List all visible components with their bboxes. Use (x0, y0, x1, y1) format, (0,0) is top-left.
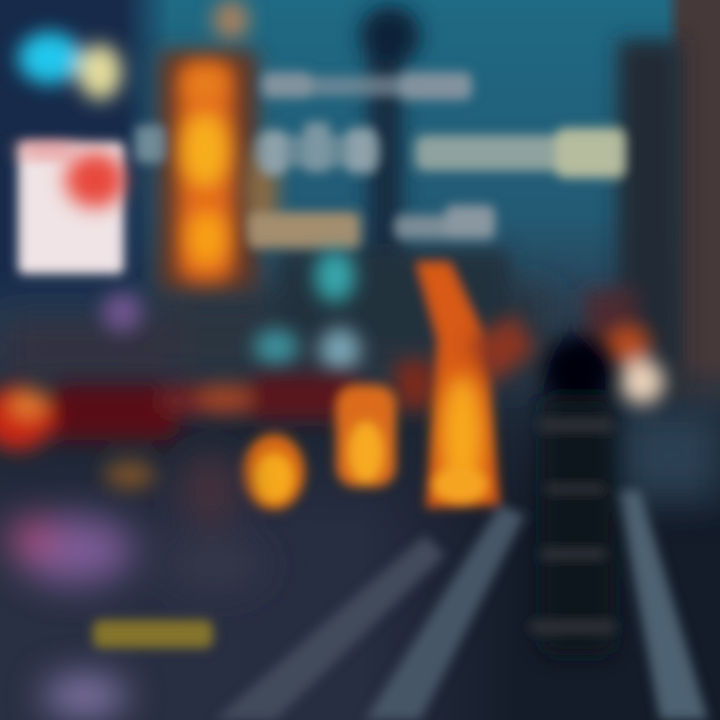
title text line 2 (135, 122, 625, 178)
figure stripes (530, 418, 616, 634)
figure body (542, 395, 614, 655)
right building shade (665, 0, 720, 420)
statue flame (416, 262, 535, 508)
button (93, 620, 213, 648)
small flame (243, 434, 305, 510)
street base (0, 480, 720, 720)
cyan lights (102, 250, 360, 372)
road markings (215, 490, 708, 720)
red cars (0, 360, 435, 490)
dark central tower (280, 6, 510, 340)
icon: cyan and yellow sign (18, 32, 122, 100)
black figure (530, 336, 616, 655)
left building shade (0, 0, 164, 312)
billboard (18, 142, 125, 274)
title text line 3 (248, 205, 495, 248)
mid-street haze (0, 290, 720, 500)
glowing white sign (606, 325, 664, 404)
tower core (181, 112, 229, 188)
tower glow (178, 60, 234, 282)
tower body (158, 50, 258, 290)
figure head (544, 336, 612, 408)
purple reflections (10, 454, 265, 716)
orange tower (158, 0, 278, 290)
right buildings (585, 40, 683, 400)
title text line 1 (262, 72, 472, 100)
tower spire (213, 0, 249, 40)
medium flame (336, 385, 396, 487)
